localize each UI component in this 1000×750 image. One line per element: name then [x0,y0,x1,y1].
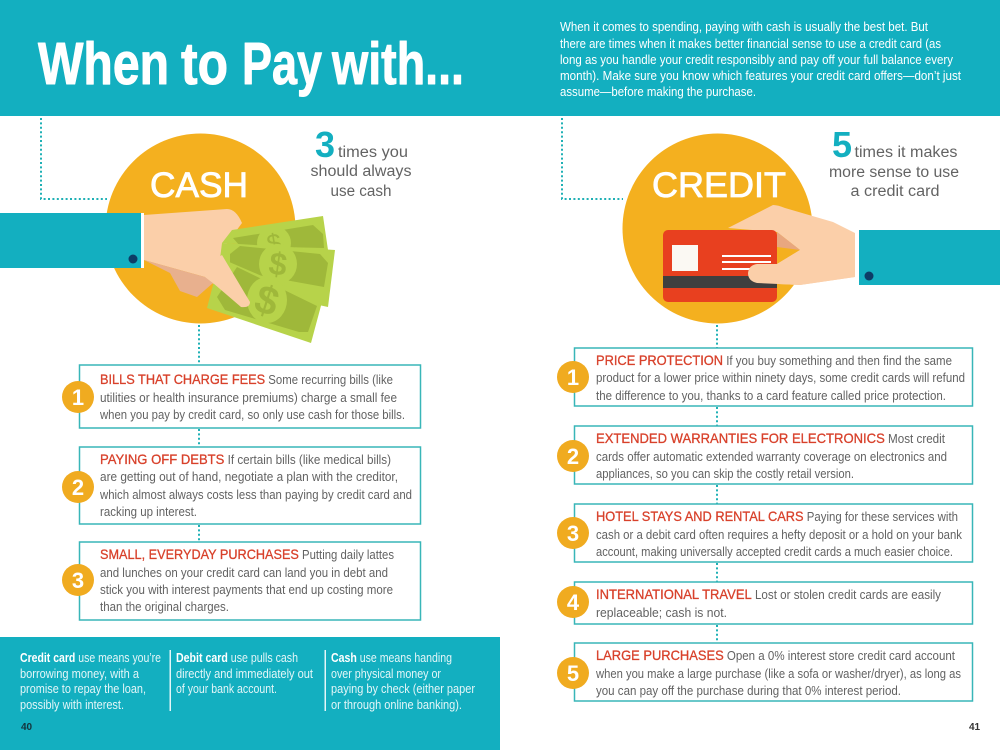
divider 1 [170,650,171,711]
credit tip 4: replaceable; cash is not. [596,606,727,620]
credit tip 2: EXTENDED WARRANTIES FOR ELECTRONICS Most credit [596,430,945,446]
definition: cash: or through online banking). [331,698,462,712]
cash tip 1: utilities or health insurance premiums) charge a small fee [100,391,397,405]
definition: credit card: promise to repay the loan, [20,682,146,696]
definition: debit card: Debit card use pulls cash [176,651,298,665]
definition: cash [331,651,475,712]
cash tip 3: and lunches on your credit card can land you in debt and [100,566,388,580]
back banknote [222,216,328,260]
back banknote: $ [264,227,284,259]
illustration: credit [622,134,1000,324]
numeral 3: 3 [315,124,335,165]
numeral 5: 5 [832,124,852,165]
cash tip 1: BILLS THAT CHARGE FEES Some recurring bills (like [100,371,393,387]
credit tip 1: the difference to you, thanks to a card feature called price protection. [596,389,946,403]
credit tip 5: 5 [567,661,579,686]
credit tip 2: appliances, so you can skip the costly retail version. [596,467,854,481]
cash hand finger over note [205,255,250,307]
cash tip 2 [62,447,420,524]
finger shadow [777,232,800,250]
credit sleeve [859,230,1000,285]
intro paragraph: month). Make sure you know which features your credit card offers—don’t just [560,69,961,83]
credit tip 5: when you make a large purchase (like a sofa or washer/dryer), as long as [595,667,961,681]
cash subtitle text: use cash [330,183,392,200]
credit tip 3: cash or a debit card often requires a hefty deposit or a hold on your bank [596,528,963,542]
cash tip 2: racking up interest. [100,505,197,519]
credit subtitle text: more sense to use [829,164,959,181]
credit subtitle text: a credit card [850,183,940,200]
middle banknote [217,243,335,307]
intro paragraph: assume—before making the purchase. [560,85,756,99]
credit tip 4: INTERNATIONAL TRAVEL Lost or stolen credit cards are easily [596,586,942,602]
title: to [181,31,228,97]
definition: credit card: possibly with interest. [20,698,124,712]
thumb [748,250,855,285]
dotted connectors: credit [562,118,717,643]
cash hand fingers [144,260,213,297]
cash tip 1: when you pay by credit card, so only use cash for those bills. [99,408,405,422]
illustration: cash [0,134,335,343]
credit card [663,230,777,302]
cash tip 3: SMALL, EVERYDAY PURCHASES Putting daily lattes [100,546,394,562]
credit tip 3: HOTEL STAYS AND RENTAL CARS Paying for these services with [596,508,958,524]
credit tip 1: PRICE PROTECTION If you buy something and then find the same [596,352,952,368]
cash cuff [141,213,144,268]
header band [0,0,1000,116]
cash tip 3 [62,542,420,620]
intro paragraph: When it comes to spending, paying with cash is usually the best bet. But [560,20,928,34]
cash tip 3: than the original charges. [100,600,229,614]
cash sleeve [0,213,141,268]
credit tip 3: 3 [567,521,579,546]
intro paragraph [560,20,961,99]
credit circle [622,134,812,324]
credit tip 2: 2 [567,444,579,469]
cash sleeve button [128,254,138,264]
hand back [728,205,855,285]
definition: debit card [176,651,313,696]
credit tip 1: 1 [567,365,579,390]
title [38,31,464,97]
credit tip 3 [557,504,972,562]
credit subtitle text: times it makes [854,144,958,161]
cash circle [106,134,296,324]
cash label: CASH [150,166,248,205]
credit tip 5: you can pay off the purchase during that 0% interest period. [596,684,901,698]
page number 40: 40 [21,722,33,733]
definition: credit card: Credit card use means you’re [20,651,161,665]
credit tip 1: product for a lower price within ninety days, some credit cards will refund [596,371,965,385]
cash tip 2: are getting out of hand, negotiate a plan with the creditor, [100,470,398,484]
definition: credit card [20,651,161,712]
definition: debit card: of your bank account. [176,682,277,696]
front banknote: $ [249,277,284,325]
credit tip 5 [557,643,972,701]
title: with... [331,31,464,97]
middle banknote: $ [267,245,290,283]
definition: cash: Cash use means handing [331,651,452,665]
front banknote [207,258,322,343]
cash tip 1 [62,365,420,428]
credit subtitle text [829,144,959,200]
credit tip 1 [557,348,972,406]
cash tip 3: 3 [72,568,84,593]
page number 41: 41 [969,722,981,733]
title: Pay [242,31,322,97]
credit subtitle [829,124,959,200]
cash tip 2: 2 [72,475,84,500]
credit tip 3: account, making universally accepted credit cards a much easier choice. [596,545,953,559]
cash subtitle text: times you [338,144,408,161]
intro paragraph: there are times when it makes better financial sense to use a credit card (as [560,37,941,51]
cash subtitle text [310,144,412,200]
intro paragraph: long as you handle your credit responsibly and pay off your full balance every [560,53,954,67]
definitions panel [0,637,500,750]
credit sleeve button [864,272,874,280]
credit tip 4 [557,582,972,624]
cash tip 2: PAYING OFF DEBTS If certain bills (like medical bills) [100,451,391,467]
credit label: CREDIT [652,166,786,205]
credit tip 2 [557,426,972,484]
credit tip 2: cards offer automatic extended warranty coverage on electronics and [596,450,947,464]
divider 2 [324,650,326,711]
cash subtitle [310,124,412,200]
definition: credit card: borrowing money, with a [20,667,139,681]
cash hand palm [144,209,250,307]
cash tip 3: stick you with interest payments that end up costing more [100,583,393,597]
credit tip 5: LARGE PURCHASES Open a 0% interest store credit card account [596,647,955,663]
dotted connectors: cash [41,118,199,542]
definition: debit card: directly and immediately out [176,667,313,681]
title: When [38,31,169,97]
definition: cash: paying by check (either paper [331,682,475,696]
credit tip 4: 4 [567,590,580,615]
cash tip 2: which almost always costs less than paying by credit card and [99,488,412,502]
cash subtitle text: should always [310,163,412,180]
definition: cash: over physical money or [331,667,441,681]
cash tip 1: 1 [72,385,84,410]
